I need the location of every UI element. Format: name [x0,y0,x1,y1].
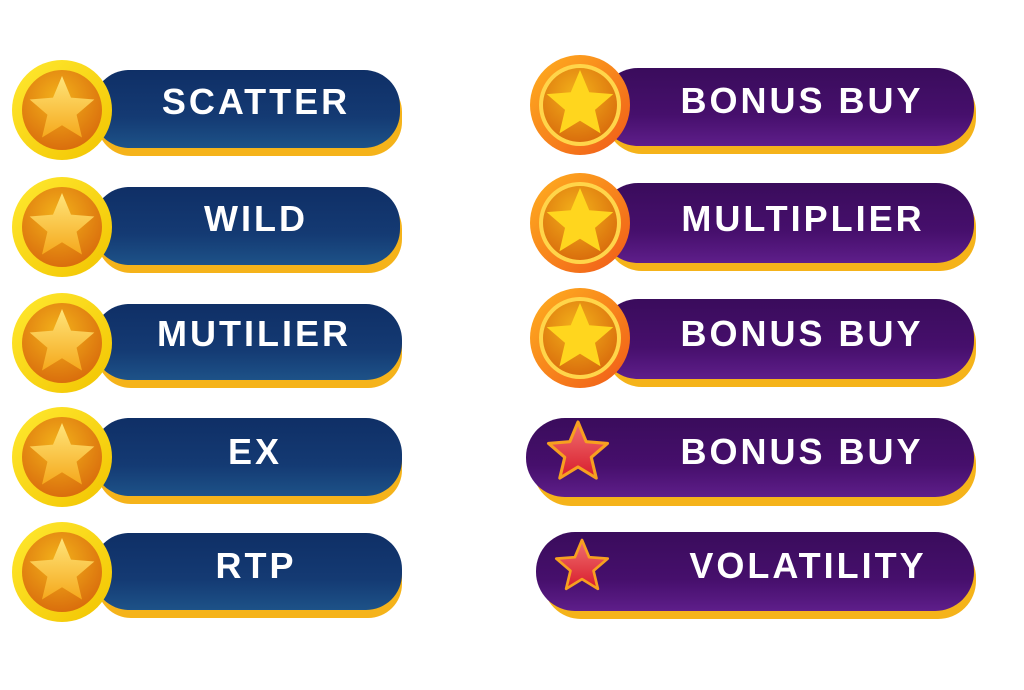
label: BONUS BUY: BONUS BUY [680,313,924,354]
button: WILD [12,177,402,277]
icon: orange coin star [530,173,630,273]
icon: red star [549,422,607,478]
button: SCATTER [12,60,402,160]
icon: gold coin star [12,60,112,160]
icon: gold coin star [12,522,112,622]
label: BONUS BUY: BONUS BUY [680,80,924,121]
icon: orange coin star [530,288,630,388]
label: MULTIPLIER: MULTIPLIER [681,198,925,239]
label: BONUS BUY: BONUS BUY [680,431,924,472]
icon: gold coin star [12,407,112,507]
label: RTP: RTP [216,545,296,586]
button: MUTILIER [12,293,402,393]
label: EX: EX [228,431,282,472]
button: BONUS BUY (2) [530,288,976,388]
button: RTP [12,522,402,622]
label: VOLATILITY: VOLATILITY [689,545,927,586]
button: BONUS BUY (1) [530,55,976,155]
button: BONUS BUY (3) [526,418,976,506]
icon: gold coin star [530,55,630,155]
icon: gold coin star [12,293,112,393]
button: MULTIPLIER [530,173,976,273]
button: VOLATILITY [536,532,976,619]
icon: red star [556,540,608,589]
button: EX [12,407,402,507]
icon: gold coin star [12,177,112,277]
label: SCATTER: SCATTER [162,81,350,122]
label: MUTILIER: MUTILIER [157,313,351,354]
label: WILD: WILD [204,198,308,239]
